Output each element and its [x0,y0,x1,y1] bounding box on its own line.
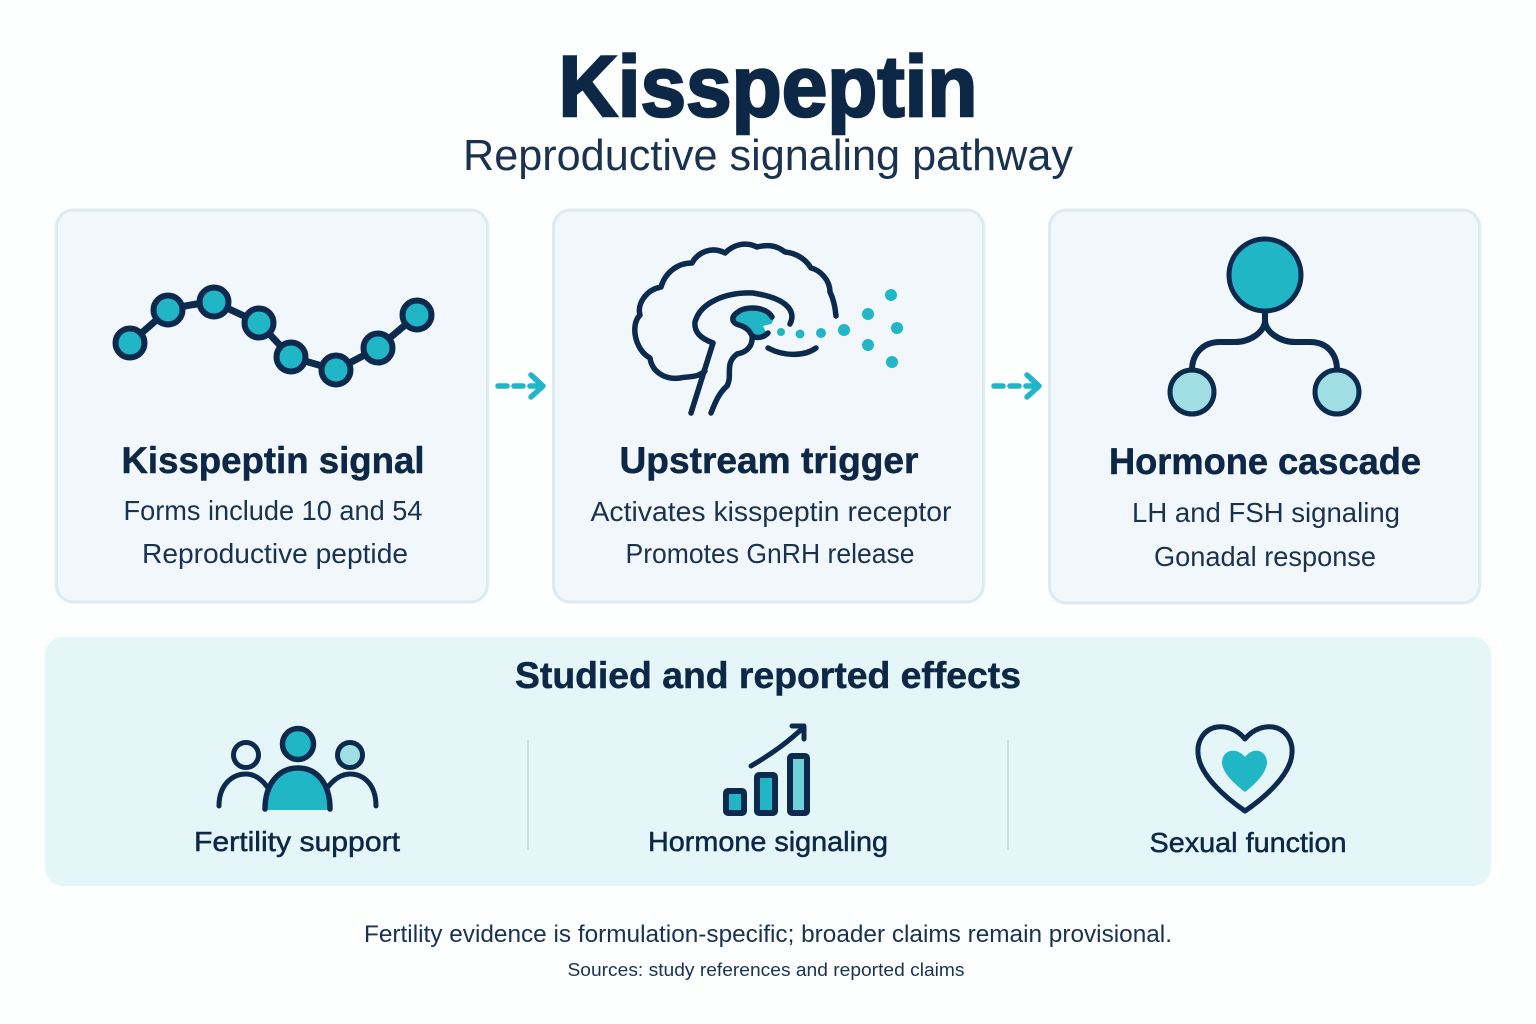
title: Kisspeptin [558,39,978,135]
label: sexual function: Sexual function [1150,827,1346,858]
label: hormone signaling: Hormone signaling [648,826,888,857]
subtitle: Reproductive signaling pathway [463,131,1073,180]
text: LH and FSH: LH and FSH signaling [1132,497,1400,528]
arrow: signal to trigger [498,375,543,397]
text: gonadal response: Gonadal response [1154,541,1376,572]
arrow: trigger to cascade [994,375,1039,397]
icon: brain with signal dots [635,244,903,413]
heading: kisspeptin signal: Kisspeptin signal [122,440,424,481]
label: fertility support: Fertility support [194,826,400,857]
text: promotes GnRH: Promotes GnRH release [626,538,914,569]
text: forms: Forms include 10 and 54 [124,495,422,526]
heading: effects: Studied and reported effects [515,655,1021,696]
text: activates receptor: Activates kisspeptin receptor [590,496,952,527]
heading: upstream trigger: Upstream trigger [620,440,918,481]
icon: rising bars [726,726,807,813]
panel: upstream trigger [554,210,984,602]
text: peptide: Reproductive peptide [142,538,408,569]
icon: heart [1198,727,1292,811]
icon: peptide chain [116,288,432,384]
icon: branching hormone nodes [1170,239,1359,414]
icon: people [219,728,376,810]
heading: hormone cascade: Hormone cascade [1109,441,1421,482]
footnote: evidence caveat: Fertility evidence is formulation-specific; broader claims remain provisional. [364,921,1172,948]
panel: kisspeptin signal [56,210,488,602]
panel: hormone cascade [1050,210,1480,603]
sources line: Sources: study references and reported claims [568,960,964,980]
panel: studied and reported effects [45,637,1491,886]
